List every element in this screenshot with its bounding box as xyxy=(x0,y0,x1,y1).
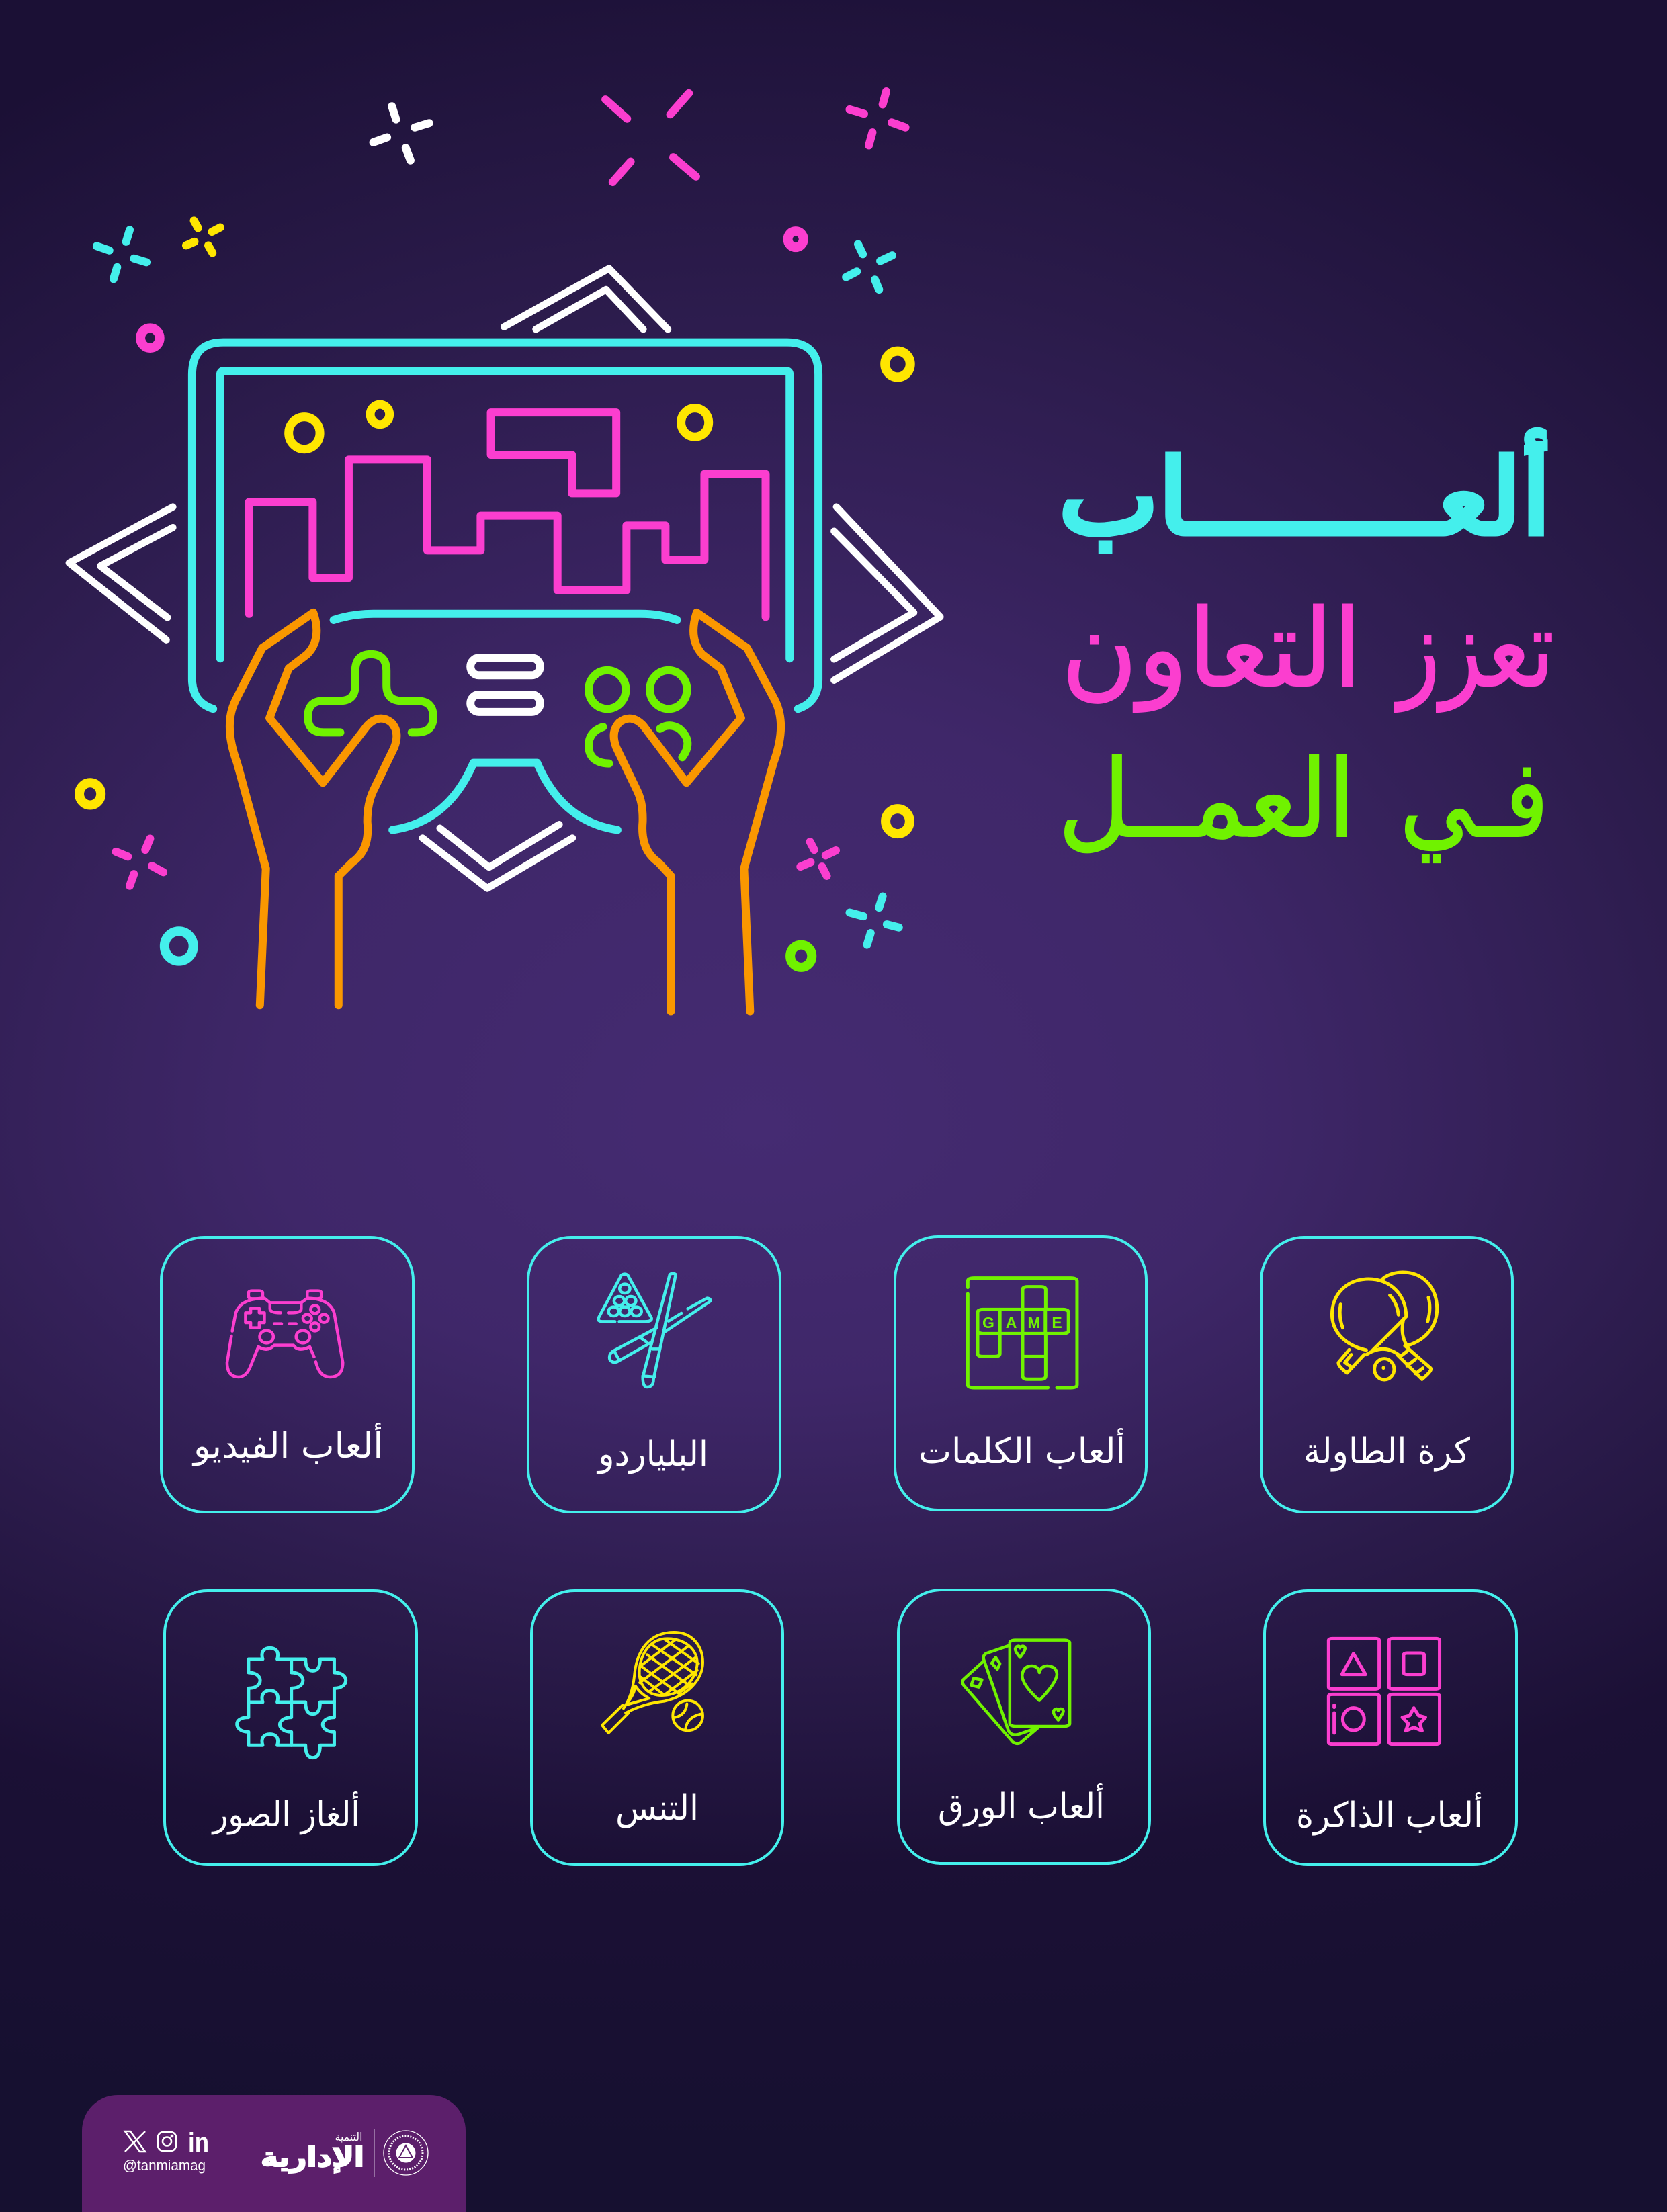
logo small line: التنمية xyxy=(335,2131,363,2144)
card frame xyxy=(165,1591,417,1865)
pink game level blocks xyxy=(249,412,766,617)
icon: crossword: G xyxy=(982,1314,994,1331)
card frame xyxy=(895,1237,1146,1510)
icon: crossword: E xyxy=(1052,1314,1062,1331)
title line 2: التعاون xyxy=(1062,586,1361,713)
title line 3: العمــل xyxy=(1058,736,1356,862)
panel: word games xyxy=(895,1237,1146,1510)
icon: tennis racket and ball xyxy=(602,1632,703,1733)
footer panel xyxy=(82,2095,466,2212)
icon: ping pong paddles xyxy=(1332,1272,1437,1380)
icon: LinkedIn: in xyxy=(188,2128,209,2158)
card frame xyxy=(1261,1237,1512,1512)
icon: X xyxy=(125,2131,145,2152)
icon: billiard rack and cues xyxy=(598,1274,710,1387)
label: البلياردو xyxy=(596,1434,708,1474)
floating rings xyxy=(79,231,910,967)
panel: memory games xyxy=(1265,1591,1516,1865)
title xyxy=(1058,430,1555,862)
magazine logo text xyxy=(261,2131,364,2173)
icon: puzzle pieces xyxy=(237,1648,346,1758)
icon: Instagram xyxy=(158,2132,176,2151)
icon: crossword: A xyxy=(1006,1314,1017,1331)
label: ألعاب الكلمات xyxy=(918,1428,1125,1472)
icon: crossword xyxy=(968,1278,1077,1388)
green controller buttons xyxy=(308,654,687,764)
icon: playing cards xyxy=(963,1640,1070,1744)
tablet frame xyxy=(192,343,818,709)
card frame xyxy=(531,1591,783,1865)
social handle: @tanmiamag xyxy=(123,2157,206,2174)
panel: card games xyxy=(898,1590,1150,1863)
card frame xyxy=(528,1237,780,1512)
card frame xyxy=(1265,1591,1516,1865)
label: كرة الطاولة xyxy=(1303,1431,1470,1472)
title line 3: فـي xyxy=(1400,736,1549,862)
emblem xyxy=(384,2131,428,2175)
white chevrons xyxy=(69,269,940,888)
social icons xyxy=(125,2128,209,2158)
title line 2 xyxy=(1062,586,1555,713)
title line 1: ألعــــــــاب xyxy=(1059,430,1551,558)
menu buttons xyxy=(470,658,540,712)
orange hands xyxy=(230,613,781,1012)
card frame xyxy=(898,1590,1150,1863)
title line 2: تعزز xyxy=(1394,586,1555,712)
label: ألعاب الورق xyxy=(938,1783,1105,1827)
panel: table tennis xyxy=(1261,1237,1512,1512)
panel: billiards xyxy=(528,1237,780,1512)
icon: crossword: M xyxy=(1027,1314,1041,1331)
sparkles xyxy=(97,91,906,945)
icon: memory tiles xyxy=(1328,1638,1440,1744)
label: ألعاب الفيديو xyxy=(191,1423,383,1466)
icon: game controller xyxy=(227,1291,343,1377)
card frame xyxy=(161,1237,413,1512)
controller outline xyxy=(334,614,677,830)
title line 3 xyxy=(1058,736,1549,862)
yellow coins xyxy=(289,404,709,449)
panel: tennis xyxy=(531,1591,783,1865)
panel: jigsaw puzzles xyxy=(165,1591,417,1865)
logo divider xyxy=(374,2129,375,2177)
label: ألعاب الذاكرة xyxy=(1296,1792,1483,1836)
footer background xyxy=(82,2095,466,2212)
label: التنس xyxy=(615,1788,699,1828)
panel: video games xyxy=(161,1237,413,1512)
illustration: hands holding a game controller xyxy=(69,91,940,1012)
logo large line: الإدارية xyxy=(261,2142,364,2173)
label: ألغاز الصور xyxy=(211,1791,360,1835)
